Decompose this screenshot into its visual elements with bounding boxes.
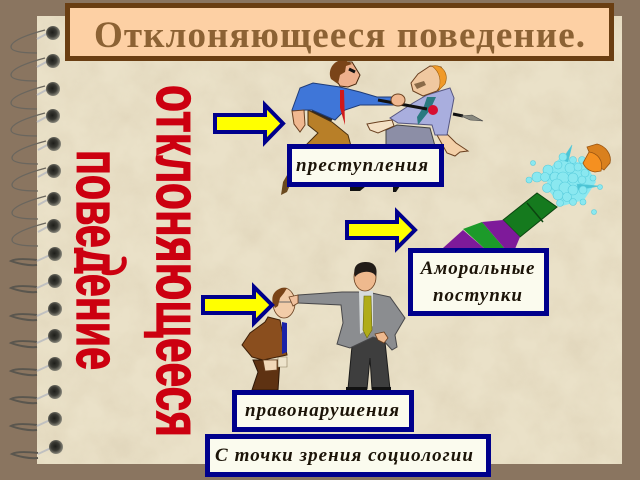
- heart wound: [428, 105, 438, 115]
- shirt tail: [278, 357, 287, 367]
- spear: [378, 100, 463, 116]
- label: аморальные поступки: поступки: [433, 285, 523, 306]
- title box: [68, 6, 612, 58]
- attacker trousers: [305, 110, 351, 146]
- arrow: to crimes: [215, 105, 283, 142]
- attacker head: [335, 62, 360, 87]
- hand: [263, 360, 277, 371]
- tie: [282, 322, 287, 354]
- trousers: [348, 336, 390, 389]
- vertical text: поведение: поведение: [64, 150, 131, 370]
- purple label lower: [443, 230, 485, 249]
- label: преступления: [290, 146, 442, 184]
- attacker tie: [340, 90, 345, 125]
- head: [354, 263, 376, 291]
- vertical text: поведение: [74, 152, 127, 370]
- green band: [463, 222, 505, 249]
- hand on head: [289, 295, 298, 306]
- victim trousers: [386, 125, 435, 146]
- victim shirt: [390, 88, 454, 135]
- arrow: to offenses: [203, 287, 272, 323]
- spiral binding: [11, 26, 63, 458]
- victim tie: [417, 97, 436, 125]
- victim hands: [367, 120, 394, 133]
- attacker belt: [312, 110, 332, 120]
- jacket: [242, 317, 287, 360]
- illustration: businessman: [289, 262, 405, 391]
- victim head: [411, 66, 446, 96]
- foam spray: [526, 145, 602, 214]
- attacker shirt: [292, 83, 397, 120]
- illustration: scolded man: [242, 288, 295, 390]
- illustration: champagne bottle: [443, 144, 610, 249]
- tie: [363, 296, 372, 338]
- arrow: to immoral acts: [347, 212, 415, 248]
- label: с точки зрения социологии: С точки зрения социологии: [215, 445, 474, 466]
- hand on hip: [375, 332, 388, 343]
- attacker hand: [292, 110, 305, 132]
- label: с точки зрения социологии: [208, 436, 488, 474]
- title text: Отклоняющееся поведение.: [94, 15, 585, 56]
- left shoe and hidden legs: [281, 170, 292, 195]
- head: [273, 288, 295, 318]
- purple label upper: [482, 220, 520, 249]
- label: преступления: преступления: [296, 155, 429, 176]
- shirt: [359, 291, 373, 334]
- bottle neck: [503, 193, 557, 237]
- jacket and pointing arm: [298, 292, 405, 350]
- label: аморальные поступки: [410, 250, 546, 314]
- label: аморальные поступки: Аморальные: [420, 258, 535, 279]
- illustration: fighting men: [281, 60, 483, 195]
- label: правонарушения: правонарушения: [245, 400, 400, 421]
- attacker grip: [391, 94, 405, 106]
- trousers: [252, 360, 280, 390]
- label: правонарушения: [234, 392, 412, 430]
- cork: [587, 144, 610, 170]
